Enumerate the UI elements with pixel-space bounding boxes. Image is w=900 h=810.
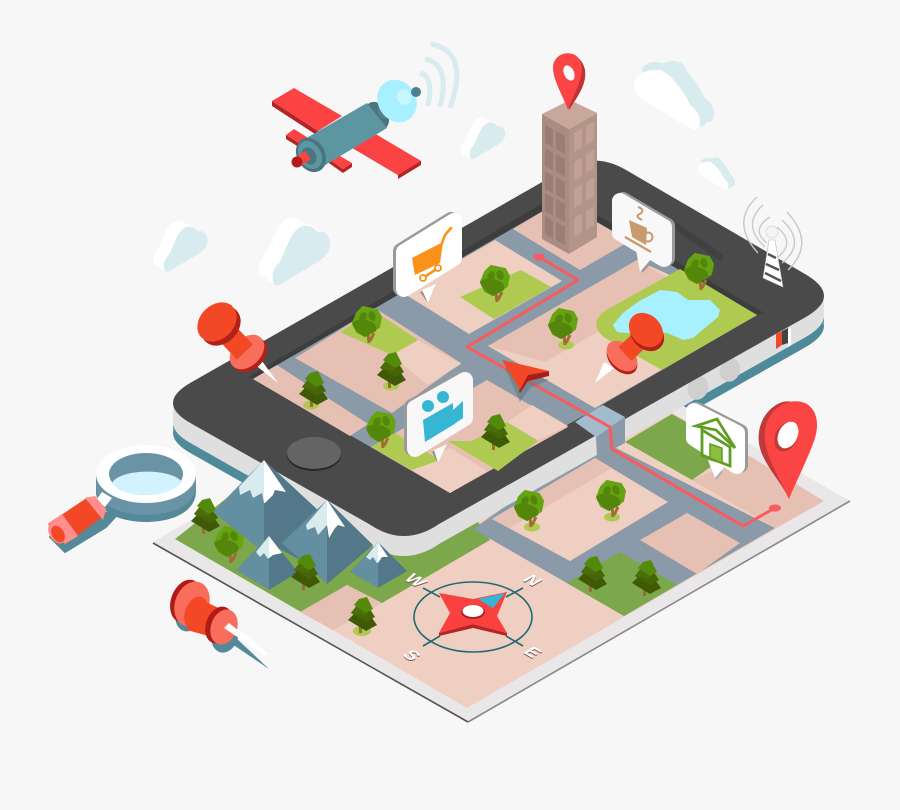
satellite body bbox=[290, 98, 394, 178]
home button bbox=[287, 437, 341, 471]
icon: coffee cup bbox=[625, 207, 652, 252]
pushpin: on phone bbox=[595, 306, 671, 383]
navigation arrow bbox=[502, 360, 549, 402]
compass letters: N bbox=[518, 572, 547, 588]
magnifying glass bbox=[44, 445, 196, 552]
screen recess shadow bbox=[248, 193, 764, 379]
cloud: near satellite bbox=[461, 117, 505, 159]
location pin on building bbox=[553, 53, 585, 110]
paper map sheet bbox=[153, 321, 850, 722]
block: right with park bbox=[488, 260, 757, 408]
block: lower centre bbox=[371, 380, 568, 493]
bubble: video camera bbox=[412, 379, 465, 463]
compass letters: E bbox=[519, 644, 546, 660]
satellite dish bbox=[370, 72, 424, 130]
compass letters: W bbox=[400, 572, 432, 591]
phone teal base band bbox=[173, 185, 824, 566]
icon: house bbox=[696, 419, 735, 466]
round trees bbox=[214, 254, 713, 563]
compass bbox=[398, 571, 547, 664]
cloud: far left bbox=[153, 221, 208, 272]
building bbox=[542, 100, 597, 254]
pine trees bbox=[191, 352, 661, 636]
pushpin: top left bbox=[189, 294, 278, 383]
compass letters: N bbox=[518, 573, 547, 590]
block: left centre bbox=[295, 308, 461, 413]
cloud: middle left bbox=[259, 218, 330, 285]
bubble: shopping cart bbox=[401, 220, 454, 303]
cloud: top right bbox=[634, 61, 714, 130]
compass letters bbox=[398, 571, 547, 664]
block: top middle bbox=[403, 240, 562, 334]
bubble: coffee bbox=[620, 200, 667, 273]
satellite wings bbox=[272, 88, 421, 179]
compass letters: E bbox=[519, 645, 546, 661]
mountains bbox=[213, 460, 407, 590]
satellite bbox=[272, 44, 457, 179]
cloud: small right bbox=[698, 158, 735, 190]
grip shadow bbox=[50, 508, 116, 552]
phone screen map bbox=[253, 201, 757, 493]
road notch crossing the phone bezel bbox=[568, 405, 625, 458]
pushpin: lying on ground bbox=[164, 575, 269, 669]
compass letters: W bbox=[400, 571, 432, 589]
icon: cart bbox=[412, 228, 451, 281]
icon: video camera bbox=[422, 391, 463, 442]
bubble: home bbox=[694, 410, 740, 480]
large map pin bbox=[759, 401, 817, 499]
compass letters: S bbox=[398, 647, 425, 663]
route line bbox=[467, 254, 781, 526]
speaker slot bbox=[677, 227, 720, 257]
pine tree in front of mountains bbox=[291, 554, 320, 590]
signal waves bbox=[420, 44, 457, 108]
phone top face bbox=[173, 161, 824, 536]
compass letters: S bbox=[398, 648, 425, 664]
signal tower bbox=[744, 197, 802, 287]
phone side wall bbox=[173, 166, 824, 556]
phone side buttons bbox=[684, 328, 791, 403]
